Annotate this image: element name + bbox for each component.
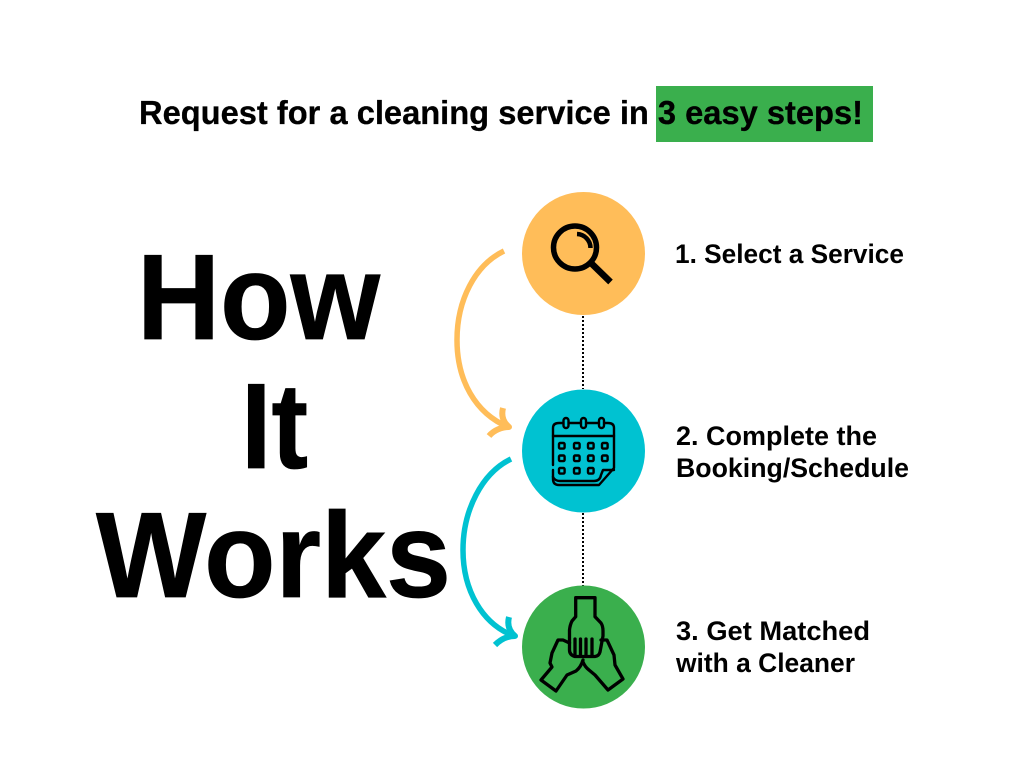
step 2 label: Booking/Schedule bbox=[676, 453, 909, 483]
icon: joined hands bbox=[541, 598, 623, 691]
title: Request for a cleaning service in 3 easy steps! bbox=[139, 94, 863, 131]
step 2 label: 2. Complete the bbox=[676, 421, 877, 451]
icon: calendar bbox=[553, 418, 614, 485]
dotted connector 1 bbox=[582, 316, 584, 389]
step 2 circle with calendar icon bbox=[522, 390, 645, 512]
heading: How It Works: How bbox=[137, 229, 381, 365]
arrow: step 2 to step 3 bbox=[463, 459, 515, 645]
arrow: step 1 to step 2 bbox=[457, 251, 509, 436]
step 1 circle with search icon bbox=[522, 192, 645, 315]
dotted connector 2 bbox=[582, 513, 584, 586]
step 3 label: with a Cleaner bbox=[675, 648, 855, 678]
heading: How It Works bbox=[96, 229, 451, 623]
step 3 circle with hands icon bbox=[522, 586, 645, 708]
step 3 label bbox=[675, 616, 870, 678]
heading: How It Works: It bbox=[241, 358, 308, 494]
title highlight bbox=[656, 86, 873, 142]
step 2 label bbox=[676, 421, 909, 483]
icon: magnifying glass bbox=[554, 226, 610, 282]
heading: How It Works: Works bbox=[96, 487, 451, 623]
step 3 label: 3. Get Matched bbox=[676, 616, 870, 646]
step 1 label: 1. Select a Service bbox=[675, 239, 904, 269]
